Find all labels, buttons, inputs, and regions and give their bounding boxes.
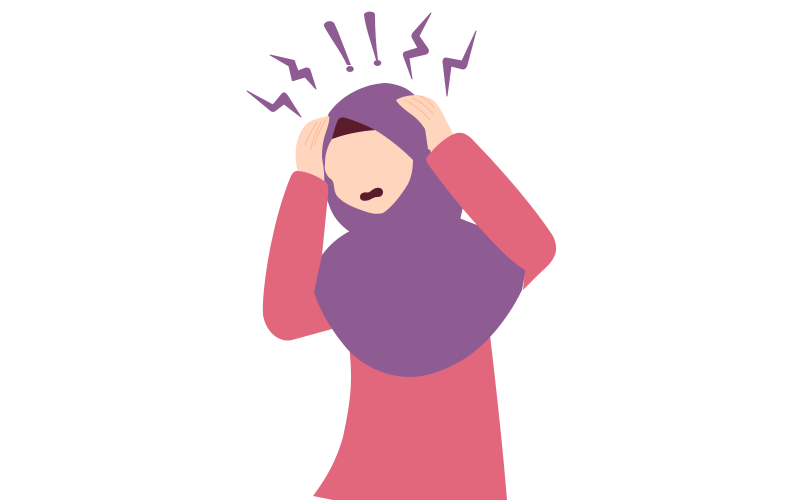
left sleeve [263,171,332,341]
face [325,130,413,214]
icon: stress bolt far right [443,31,476,96]
icon: stress bolt upper right [403,13,431,79]
right sleeve [426,133,556,290]
hijab shawl [314,215,526,377]
icon: stress bolt upper left [270,55,316,89]
mouth [360,188,383,201]
icon: right hand [396,95,454,155]
dress body [313,335,507,500]
icon: left hand [296,116,329,184]
hair fringe [332,117,375,139]
hijab head wrap [322,83,463,232]
icon: exclamation mark right [364,12,381,66]
icon: stress bolt far left [247,91,301,117]
icon: exclamation mark left [324,21,354,72]
